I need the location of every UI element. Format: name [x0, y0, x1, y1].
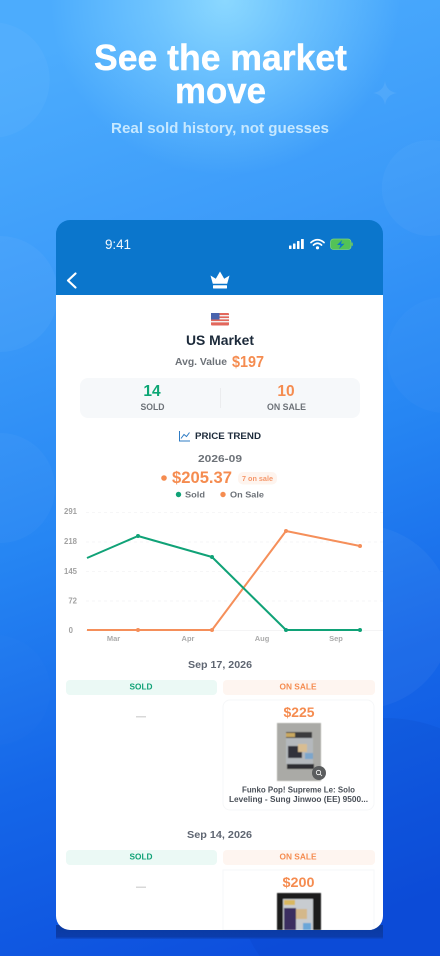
average value	[175, 356, 264, 368]
section heading: price trend: PRICE TREND	[195, 431, 261, 442]
y axis labels: 145	[64, 567, 78, 576]
x axis labels: Aug	[255, 634, 270, 643]
stats panel: SOLD	[140, 402, 165, 413]
icon: US flag	[211, 313, 229, 326]
x axis labels: Mar	[107, 634, 120, 643]
subtitle: Real sold history, not guesses	[111, 120, 329, 137]
listing title: Leveling - Sung Jinwoo (EE) 9500...	[229, 794, 368, 804]
status time: 9:41	[105, 237, 131, 252]
icon: magnifier	[312, 766, 326, 780]
stats panel	[80, 378, 360, 418]
sold chip	[66, 850, 217, 865]
product photo	[277, 893, 321, 930]
sold chip: SOLD	[130, 852, 153, 862]
selected price: $205.37	[172, 469, 232, 487]
empty sold marker	[136, 886, 146, 888]
on sale chip: ON SALE	[280, 682, 317, 692]
selected price: 7 on sale	[242, 474, 273, 483]
on sale chip	[223, 850, 375, 865]
on sale series	[87, 529, 362, 632]
icon: battery	[330, 239, 353, 250]
chart legend: On Sale	[230, 490, 264, 500]
icon: crown	[210, 272, 230, 288]
stats panel: 10	[277, 383, 295, 400]
icon: trend chart	[180, 431, 190, 441]
y axis labels: 0	[69, 626, 74, 635]
y axis labels	[64, 507, 78, 635]
icon: signal	[289, 239, 304, 249]
average value: $197	[232, 354, 264, 371]
stats panel: ON SALE	[267, 402, 306, 413]
title: move	[175, 70, 266, 111]
price: $225	[284, 705, 315, 720]
x axis labels: Apr	[182, 634, 195, 643]
phone screen	[56, 220, 383, 930]
on sale chip	[223, 680, 375, 695]
y axis labels: 218	[64, 537, 78, 546]
y axis labels: 291	[64, 507, 78, 516]
market name: US Market	[186, 332, 254, 348]
y axis labels: 72	[68, 596, 78, 606]
selected period: 2026-09	[198, 453, 242, 465]
sold chip: SOLD	[130, 682, 153, 692]
icon: wifi	[311, 240, 324, 248]
date heading: Sep 17: Sep 17, 2026	[188, 659, 252, 671]
listing card: $200	[223, 870, 374, 930]
icon: back chevron	[68, 274, 76, 288]
average value: Avg. Value	[175, 356, 227, 368]
listing title	[230, 786, 368, 804]
date heading: Sep 14: Sep 14, 2026	[187, 829, 252, 841]
selected price	[161, 470, 277, 484]
chart legend: Sold	[185, 490, 205, 500]
app header	[56, 220, 383, 295]
x axis labels: Sep	[329, 634, 343, 643]
product photo	[277, 723, 321, 781]
sold series	[87, 534, 362, 632]
listing title: Funko Pop! Supreme Le: Solo	[242, 784, 355, 794]
line chart	[64, 507, 383, 643]
icon: sparkle	[373, 81, 397, 105]
chart legend	[176, 492, 264, 498]
empty sold marker	[136, 716, 146, 718]
x axis labels	[107, 636, 342, 642]
stats panel: 14	[143, 383, 161, 400]
sold chip	[66, 680, 217, 695]
listing card: $225	[223, 700, 374, 810]
title	[94, 37, 347, 111]
title: See the market	[94, 37, 347, 78]
on sale chip: ON SALE	[280, 852, 317, 862]
price: $200	[282, 875, 314, 890]
